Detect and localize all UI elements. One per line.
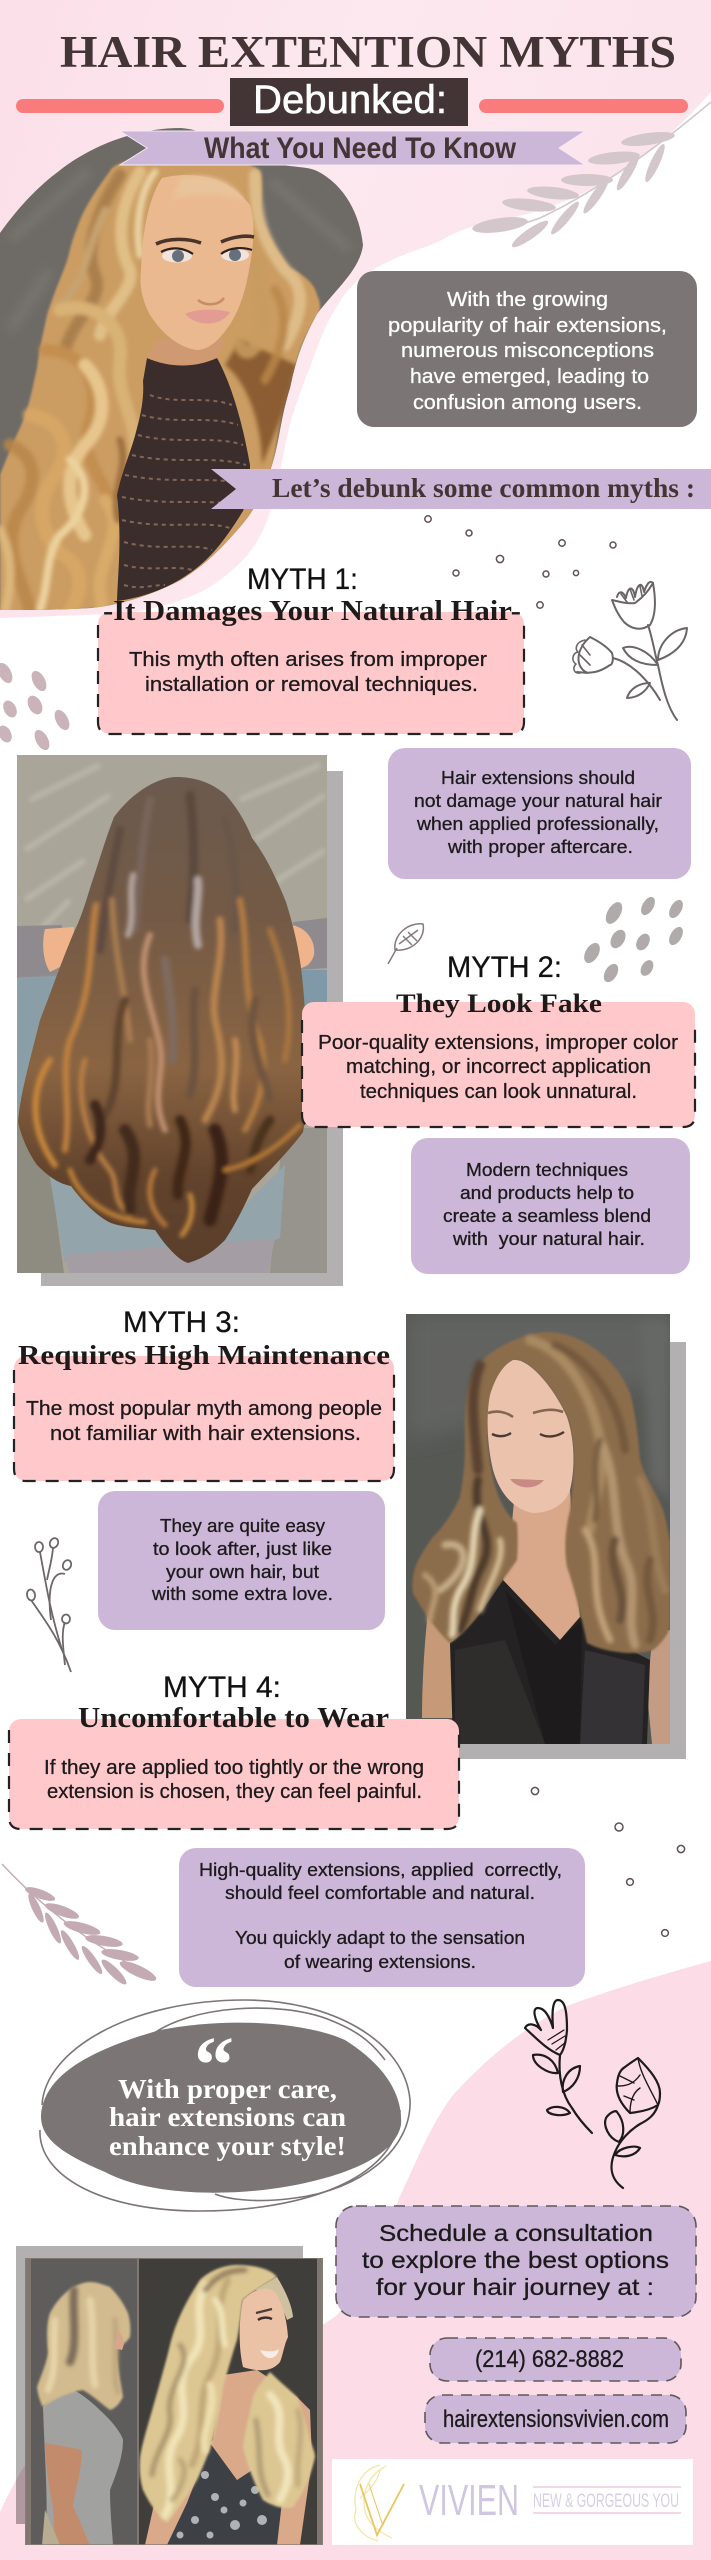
quote blob with scribbled outline: enhance your style! [109,2131,346,2161]
photo shadow 1 [41,771,343,1286]
myth 4 statement panel: If they are applied too tightly or the wrong [44,1757,424,1779]
myth 4 fact panel: of wearing extensions. [284,1951,476,1972]
clothes [17,976,56,1122]
myth 4 statement panel: extension is chosen, they can feel painful. [47,1781,422,1803]
call to action panel: to explore the best options [362,2247,669,2273]
icon: flower doodle one [525,2000,592,2133]
myth 3 statement panel: The most popular myth among people [26,1398,382,1420]
ribbon: What You Need To Know: What You Need To Know [204,132,517,165]
myth 2 fact panel: with your natural hair. [452,1228,645,1249]
myth 3 fact panel: to look after, just like [153,1538,332,1559]
myth 1 fact panel [388,748,691,879]
portrait photo: woman with long blonde waves [0,120,370,620]
top pink curved background shape [0,0,711,618]
call to action panel [336,2206,696,2317]
myth 2 fact panel [411,1138,690,1274]
title: HAIR EXTENTION MYTHS [60,27,676,77]
quote blob with scribbled outline: “ [194,2022,234,2110]
myth 2 fact panel: create a seamless blend [443,1205,651,1226]
arms [422,1616,454,1718]
icon: sketched flowers top right [573,582,687,720]
portrait dark hair behind neck on right [225,340,297,465]
intro text panel: popularity of hair extensions, [388,315,667,337]
before: hair [37,2282,130,2410]
myth 3 statement panel [14,1340,394,1481]
photo: before and after blonde extensions [25,2258,323,2545]
after: neck, arms and top [145,2370,312,2545]
myth 3 fact panel: your own hair, but [166,1561,319,1582]
black top [450,1580,650,1744]
myth 1 statement panel: installation or removal techniques. [145,674,478,696]
photo: woman with brown layered hair and black top [406,1314,670,1744]
myth 1 fact panel: when applied professionally, [416,813,659,834]
intro text panel: With the growing [447,289,608,311]
decorative leaf branch lower left [2,1864,158,1987]
myth 2 statement panel: They Look Fake [396,989,602,1018]
myth 4 fact panel: You quickly adapt to the sensation [235,1927,525,1948]
myth 4 label: MYTH 4: [163,1671,281,1704]
myth 4 fact panel: should feel comfortable and natural. [225,1882,535,1903]
myth 3 fact panel: They are quite easy [160,1515,326,1536]
myth 1 statement panel: -It Damages Your Natural Hair- [103,596,521,627]
portrait neck and face [147,340,226,366]
myth 1 fact panel: Hair extensions should [441,767,635,788]
subtitle: Debunked with side bars: Debunked: [253,78,447,122]
decorative pink dots left [0,660,72,753]
myth 2 fact panel: and products help to [460,1182,634,1203]
portrait top with leopard pattern [117,358,250,601]
photo shadow 3 [16,2246,303,2524]
myth 2 statement panel: techniques can look unnatural. [360,1081,637,1103]
myth 3 label: MYTH 3: [123,1306,240,1339]
myth 1 label: MYTH 1: [247,563,358,596]
logo: Vivien [332,2459,693,2545]
myth 2 statement panel [302,989,695,1127]
quote blob with scribbled outline [40,2000,410,2211]
myth 2 statement panel: Poor-quality extensions, improper color [318,1032,678,1054]
icon: sketched twig [26,1537,73,1672]
myth 3 statement panel: Requires High Maintenance [18,1340,390,1370]
sleeves and arms [17,925,62,978]
decorative leaf branch top right [471,102,711,251]
icon: flower doodle two [605,2058,660,2188]
myth 1 fact panel: not damage your natural hair [414,790,662,811]
myth 2 label: MYTH 2: [447,951,562,984]
logo: Vivien: VIVIEN [419,2476,519,2525]
intro text panel: numerous misconceptions [401,340,654,362]
myth 4 fact panel [179,1848,585,1987]
chest [503,1490,580,1640]
myth 2 fact panel: Modern techniques [466,1159,628,1180]
myth 3 statement panel: not familiar with hair extensions. [50,1423,361,1445]
portrait hair strands [0,172,300,612]
intro text panel: confusion among users. [413,392,642,414]
myth 4 statement panel [9,1703,459,1829]
subtitle: Debunked with side bars [16,78,688,126]
after: hair [140,2265,277,2523]
hair mass [18,777,307,1263]
bottom pink curved background shape [0,1961,711,2560]
myth 2 statement panel: matching, or incorrect application [346,1056,651,1078]
intro text panel [357,271,697,427]
photo shadow 2 [422,1342,686,1759]
myth 1 statement panel: This myth often arises from improper [129,649,487,671]
photo: long brown hair from behind [17,755,327,1273]
phone number pill: (214) 682-8882 [475,2346,624,2373]
myth 3 fact panel: with some extra love. [151,1583,333,1604]
ribbon: Let's debunk some common myths [211,469,711,509]
intro text panel: have emerged, leading to [410,366,649,388]
quote blob with scribbled outline: With proper care, [118,2074,337,2104]
portrait hair base [0,155,320,612]
hair [412,1332,670,1653]
decorative small circles near myth 1 [425,516,616,608]
website pill: hairextensionsvivien.com [443,2406,669,2433]
myth 4 statement panel: Uncomfortable to Wear [78,1703,389,1734]
call to action panel: for your hair journey at : [376,2274,654,2300]
phone number pill [430,2338,681,2381]
myth 1 fact panel: with proper aftercare. [447,836,633,857]
face [488,1360,573,1513]
myth 4 fact panel: High-quality extensions, applied correctly, [199,1859,562,1880]
website pill [425,2395,686,2443]
quote blob with scribbled outline: hair extensions can [109,2102,346,2132]
before: arm and tee [43,2390,123,2545]
call to action panel: Schedule a consultation [379,2220,653,2246]
decorative gray dots [581,895,686,985]
myth 1 statement panel [98,596,524,734]
decorative small circles right [531,1787,685,1936]
lower background [17,1122,64,1273]
myth 3 fact panel [98,1491,385,1630]
icon: small sketched leaf [388,924,423,964]
ribbon: Let's debunk some common myths: Let’s debunk some common myths : [272,473,695,503]
after: face [240,2289,288,2370]
